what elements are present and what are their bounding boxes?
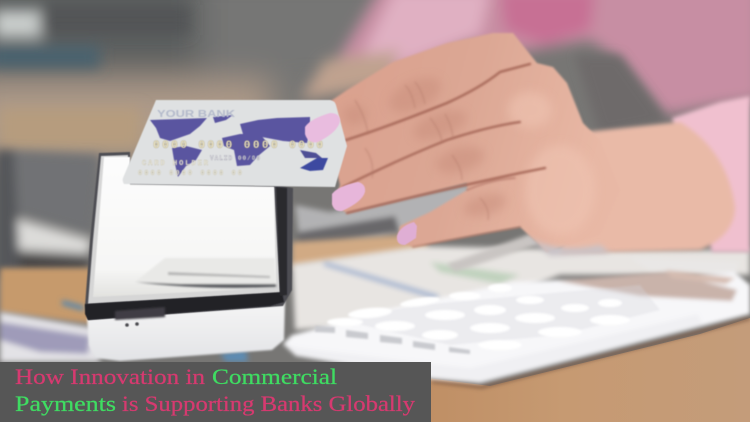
hand and wrist holding the card (313, 33, 750, 256)
fingernails (305, 113, 417, 245)
nail: index finger (305, 113, 340, 142)
title line 2 pink: is Supporting Banks Globally (122, 391, 415, 416)
nail: middle finger (332, 182, 365, 211)
card number: 0000 0000 0000 0000 (153, 140, 323, 152)
knuckle wrinkles (355, 82, 488, 220)
knuckle shading (343, 70, 509, 220)
pink shirt cuff (672, 96, 750, 252)
card valid date: VALID 00/00 (210, 155, 260, 162)
finger highlights (508, 92, 595, 235)
credit card (123, 100, 347, 187)
paper documents on the desk (0, 246, 750, 362)
wrist (560, 122, 735, 253)
white payment terminal (85, 152, 293, 361)
finger creases (330, 64, 545, 247)
card bank name: YOUR BANK (157, 109, 236, 120)
card reflection on screen (135, 258, 276, 288)
laptop, out of focus (0, 150, 470, 278)
card holder second line: 0000 0000 0000 00 (138, 170, 242, 178)
pen, out of focus (447, 234, 540, 272)
title banner (0, 362, 431, 422)
wooden desk (0, 234, 750, 422)
nail: ring finger (397, 222, 417, 245)
palm and fingers (313, 33, 620, 252)
pink blouse sleeve, out of focus (300, 0, 750, 135)
card holder text: CARD HOLDER (142, 160, 209, 168)
title line 1 green: Commercial (212, 364, 337, 389)
title line 2 green: Payments (15, 391, 116, 416)
world map on card (150, 115, 328, 177)
terminal indicator dots (125, 322, 139, 327)
calculator (283, 258, 750, 383)
grey wall gap behind the hand (575, 55, 668, 135)
title line 1 pink: How Innovation in (15, 364, 205, 389)
calculator keys (315, 284, 660, 354)
